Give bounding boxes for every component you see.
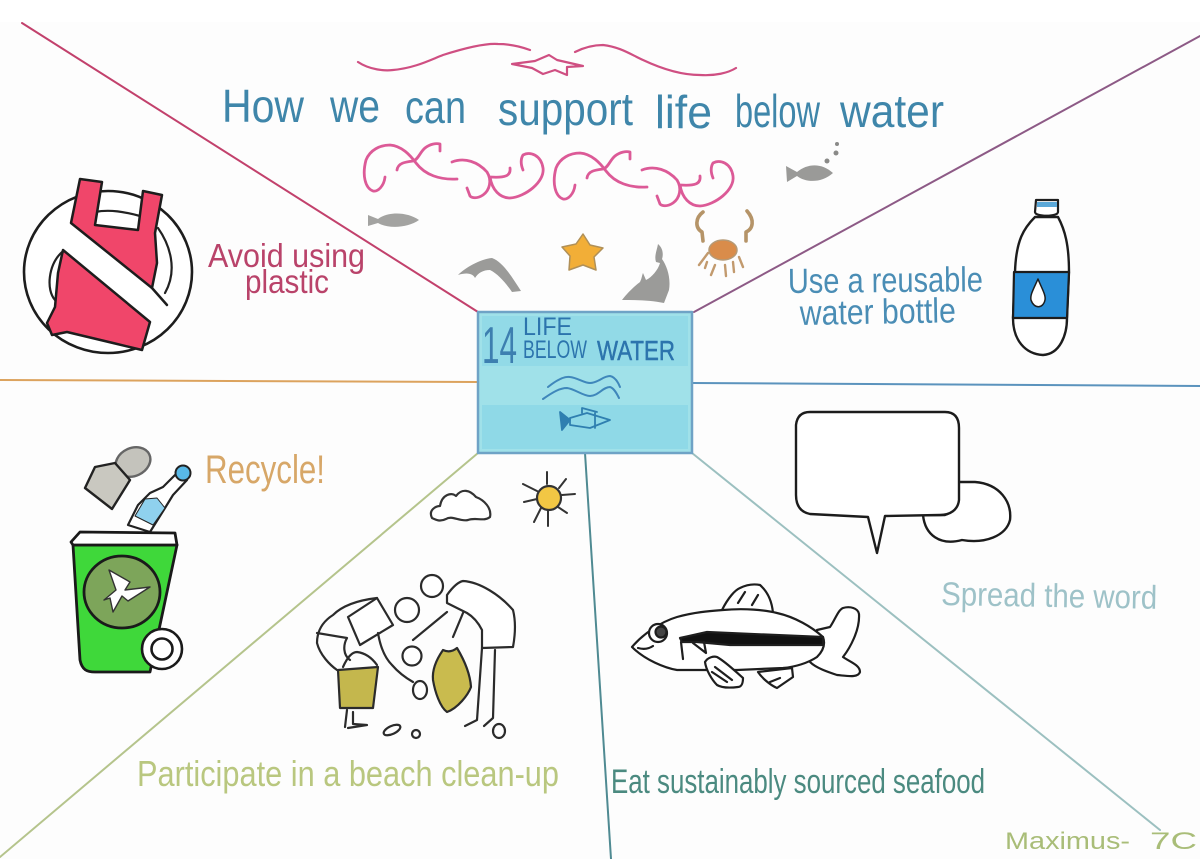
icon: fish drawing	[632, 584, 860, 688]
icon: small fish	[368, 213, 419, 227]
title: below	[735, 85, 821, 137]
goal name: BELOW	[523, 336, 587, 364]
panel: beach clean-up	[137, 472, 575, 794]
title: can	[405, 81, 466, 133]
signature: 7C	[1150, 828, 1197, 855]
icon: right dolphin	[622, 244, 670, 303]
panel: reusable bottle	[788, 200, 1069, 355]
panel: central goal 14 box	[478, 312, 692, 453]
caption: Avoid using	[208, 237, 365, 274]
icon: no-plastic sign	[24, 179, 192, 353]
panel: sustainable seafood	[611, 584, 985, 801]
panel: spread the word	[796, 412, 1157, 616]
icon: fish with bubbles	[786, 142, 839, 182]
icon: blue fish	[560, 408, 610, 430]
icon: can and bottle	[85, 442, 190, 532]
icon: starfish	[562, 234, 603, 270]
signature: Maximus-	[1005, 828, 1130, 855]
caption: Use a reusable	[788, 260, 983, 301]
caption	[788, 260, 983, 333]
goal name: LIFE	[523, 313, 572, 341]
panel: recycle	[71, 442, 325, 672]
title: life	[655, 86, 712, 138]
caption: Recycle!	[205, 448, 325, 492]
icon: sun	[523, 472, 575, 526]
title: support	[498, 83, 633, 135]
title	[222, 80, 944, 138]
icon: speech bubbles	[796, 412, 1010, 553]
icon: recycling bin	[71, 532, 182, 672]
icon: cloud	[431, 491, 490, 521]
goal name	[523, 313, 675, 366]
caption: Spread the word	[941, 575, 1157, 616]
goal number: 14	[482, 317, 517, 375]
title: we	[329, 80, 380, 132]
caption: Participate in a beach clean-up	[137, 753, 559, 794]
caption	[208, 237, 365, 300]
swirl ornament	[364, 144, 733, 206]
icon: crab	[697, 211, 752, 276]
caption: Eat sustainably sourced seafood	[611, 763, 985, 801]
caption: water bottle	[799, 291, 956, 333]
title: water	[839, 85, 944, 137]
top ornament	[358, 44, 736, 75]
icon: people collecting litter	[317, 575, 515, 738]
goal name: WATER	[597, 335, 675, 366]
icon: left dolphin	[458, 258, 521, 292]
title: How	[222, 80, 305, 132]
caption: plastic	[245, 263, 329, 300]
icon: water bottle	[1013, 200, 1069, 355]
signature	[1005, 828, 1197, 855]
icon: waves	[543, 376, 620, 399]
panel: avoid plastic	[24, 179, 365, 353]
